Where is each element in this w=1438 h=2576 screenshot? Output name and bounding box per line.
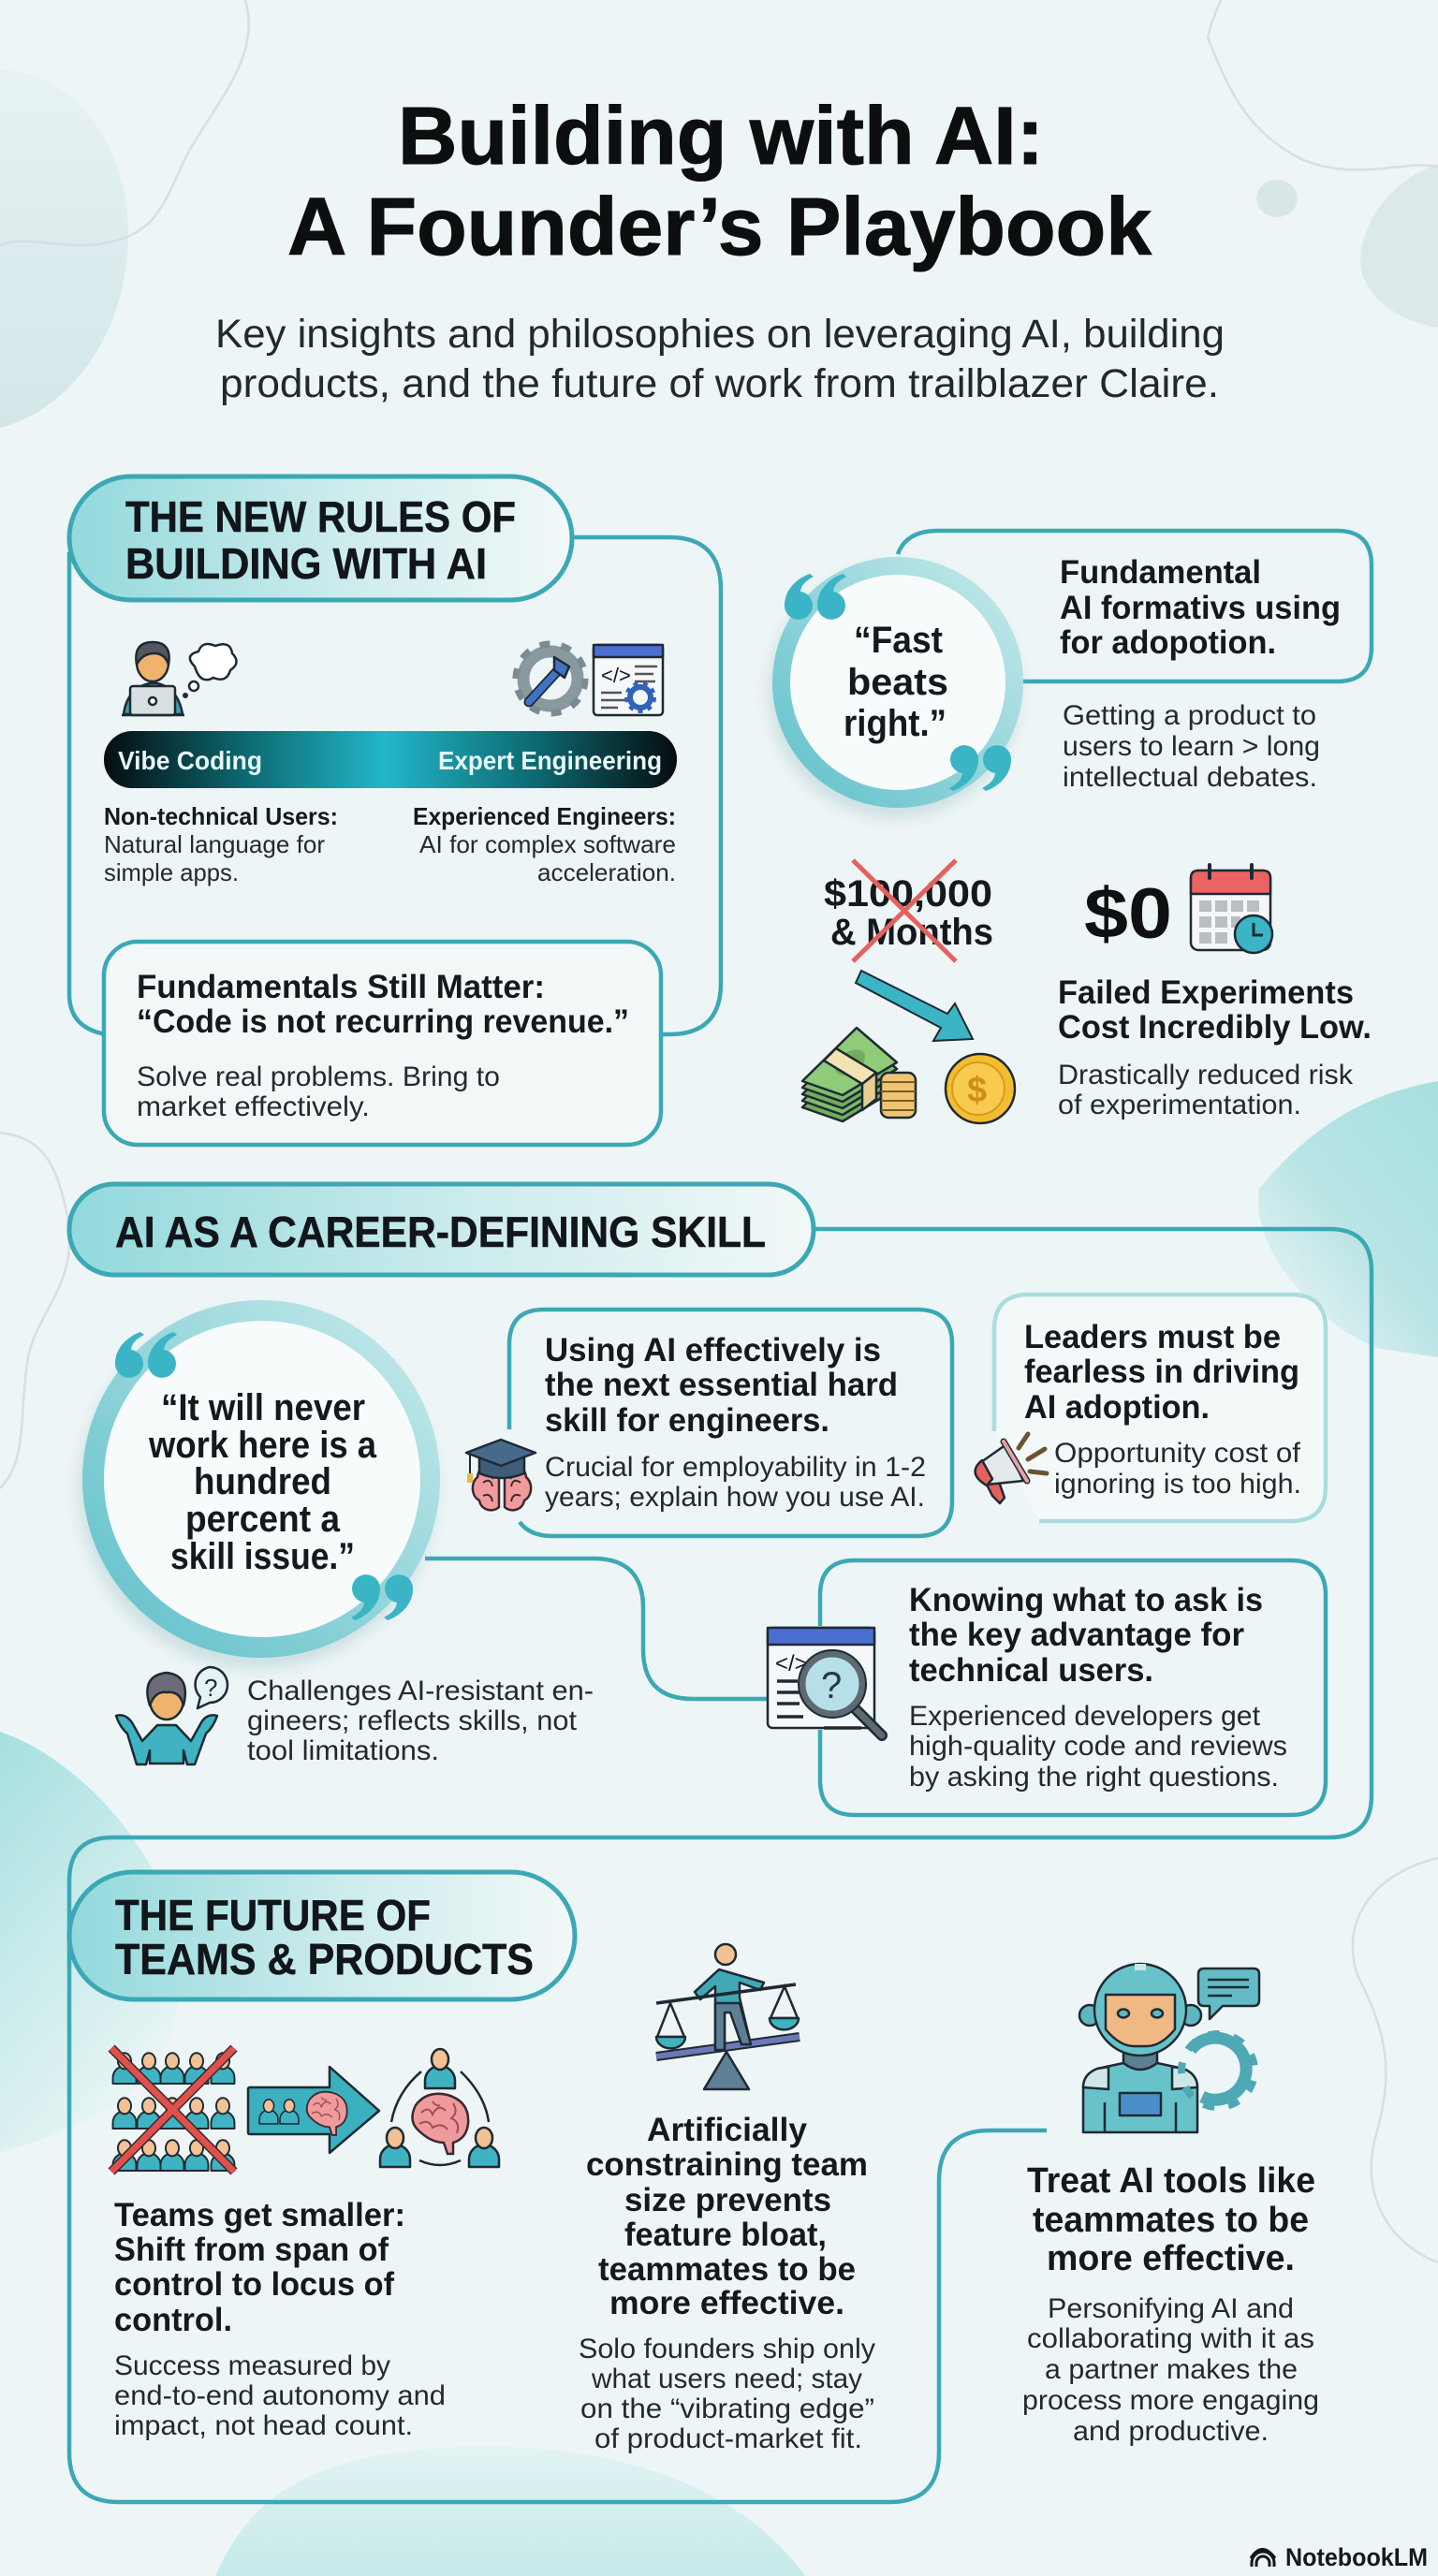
text: challenges AI-resistant engineers: gineers; reflects skills, not <box>247 1705 578 1736</box>
text: treat AI tools like teammates: and productive. <box>1073 2416 1269 2447</box>
arrow: team and brain <box>248 2067 379 2153</box>
crossed out cost: $100,000 <box>824 873 992 915</box>
icon: robot teammate <box>1079 1964 1201 2132</box>
box: using AI effectively: Using AI effectively is <box>545 1332 881 1368</box>
panel: the new rules of building with AI <box>69 476 721 1145</box>
text: failed experiments <box>1058 974 1372 1120</box>
box: knowing what to ask: by asking the right questions. <box>909 1762 1279 1793</box>
icon: graduation cap on brain <box>466 1440 536 1510</box>
subtitle: Key insights and philosophies on leveraging AI, building <box>215 312 1225 357</box>
icon: close quote <box>351 1574 413 1620</box>
text: teams get smaller: Success measured by <box>114 2350 390 2381</box>
text: teams get smaller <box>114 2197 446 2441</box>
text: teams get smaller: control. <box>114 2302 232 2338</box>
text: treat AI tools like teammates: a partner makes the <box>1045 2354 1298 2385</box>
icon: person with laptop thinking <box>122 642 237 715</box>
icon: code window with magnifier: </> <box>775 1651 808 1676</box>
panel: cost of experiments <box>802 860 1372 1123</box>
icon: person balancing on scale <box>656 1944 800 2089</box>
panel outline <box>69 537 721 1034</box>
icon: question bubble <box>196 1667 227 1708</box>
box: knowing what to ask: Knowing what to ask is <box>909 1582 1263 1618</box>
box: knowing what to ask: the key advantage for <box>909 1617 1244 1653</box>
text: treat AI tools like teammates <box>1022 2161 1319 2447</box>
icon: gold coin <box>946 1054 1015 1123</box>
panel: the future of teams and products <box>69 1872 1319 2502</box>
callout: fundamentals still matter: market effectively. <box>137 1091 370 1122</box>
text: getting a product to users: intellectual debates. <box>1063 762 1317 793</box>
icon: crossed out large team <box>111 2048 234 2172</box>
box: fundamental AI formatives <box>898 531 1372 681</box>
box: fundamental AI formatives: Fundamental <box>1060 554 1261 591</box>
text: getting a product to users: Getting a product to <box>1063 700 1316 731</box>
text: treat AI tools like teammates: Personifying AI and <box>1048 2293 1294 2324</box>
box: fundamental AI formatives: for adopotion. <box>1060 624 1276 661</box>
box: leaders must be fearless <box>994 1295 1326 1521</box>
subtitle <box>215 312 1225 406</box>
text: non-technical users <box>104 802 338 886</box>
text: non-technical users: Natural language for <box>104 830 325 858</box>
callout: fundamentals still matter: “Code is not recurring revenue.” <box>137 1003 629 1040</box>
box: fundamental AI formatives: AI formativs using <box>1060 590 1341 626</box>
text: artificially constraining team size: constraining team <box>586 2146 868 2183</box>
box: leaders must be fearless: Opportunity cost of <box>1054 1438 1301 1469</box>
text: artificially constraining team size: teammates to be <box>598 2251 856 2288</box>
text: $0: $0 <box>1084 874 1172 954</box>
quote circle <box>79 1300 440 1669</box>
subtitle: products, and the future of work from trailblazer Claire. <box>220 361 1219 406</box>
text: challenges AI-resistant engineers <box>247 1676 594 1766</box>
icon: cash stack <box>802 1028 897 1121</box>
quote circle: “Fast <box>854 620 943 661</box>
callout: fundamentals still matter <box>104 942 661 1145</box>
callout: fundamentals still matter: Fundamentals Still Matter: <box>137 969 545 1005</box>
icon: coin stack <box>881 1073 916 1118</box>
section heading pill: BUILDING WITH AI <box>125 539 487 588</box>
text: challenges AI-resistant engineers: tool limitations. <box>247 1735 439 1766</box>
icon: code window with gear: </> <box>601 664 631 687</box>
box: using AI effectively: years; explain how you use AI. <box>545 1482 925 1513</box>
box: knowing what to ask <box>820 1560 1326 1815</box>
spectrum bar: vibe coding to expert engineering: Vibe Coding <box>118 746 262 775</box>
icon: small team around brain <box>380 2049 499 2167</box>
text: experienced engineers <box>413 802 676 886</box>
icon: gear and wrench <box>516 644 585 713</box>
text: treat AI tools like teammates: more effective. <box>1047 2239 1295 2278</box>
quote circle: skill issue.” <box>170 1536 355 1577</box>
icon: code window with magnifier: ? <box>821 1665 842 1706</box>
icon: calendar with clock <box>1191 865 1272 953</box>
quote circle <box>769 557 1023 818</box>
icon: shrugging person <box>116 1673 217 1764</box>
crossed out cost <box>824 860 993 961</box>
text: teams get smaller: impact, not head count. <box>114 2410 413 2441</box>
box: using AI effectively: the next essential hard <box>545 1367 898 1403</box>
text: non-technical users: Non-technical Users: <box>104 802 338 830</box>
panel: fast beats right <box>769 531 1372 818</box>
icon: question bubble: ? <box>204 1674 217 1702</box>
arrow: downward cost <box>856 971 973 1041</box>
text: artificially constraining team size: on the “vibrating edge” <box>580 2393 874 2424</box>
text: treat AI tools like teammates: teammates to be <box>1033 2201 1309 2240</box>
text: failed experiments: Cost Incredibly Low. <box>1058 1009 1372 1046</box>
text: getting a product to users <box>1063 700 1320 793</box>
text: experienced engineers: AI for complex software <box>419 830 676 858</box>
icon: gear <box>1181 2034 1255 2107</box>
icon: open quote <box>115 1332 177 1378</box>
box: leaders must be fearless: Leaders must be <box>1024 1319 1281 1355</box>
spectrum bar: vibe coding to expert engineering <box>104 731 677 788</box>
panel: AI as a career-defining skill <box>69 1184 1372 1881</box>
icon: code window with gear <box>594 645 663 715</box>
quote circle: “It will never <box>161 1387 365 1428</box>
text: artificially constraining team size: what users need; stay <box>591 2364 862 2394</box>
text: teams get smaller: end-to-end autonomy and <box>114 2380 446 2411</box>
text: failed experiments: Failed Experiments <box>1058 974 1354 1011</box>
title: A Founder’s Playbook <box>287 182 1152 272</box>
icon: speech bubble <box>1198 1969 1259 2019</box>
panel outline <box>69 1229 1372 1881</box>
section heading pill: THE FUTURE OF <box>115 1891 431 1939</box>
spectrum bar: vibe coding to expert engineering: Expert Engineering <box>438 746 662 775</box>
panel outline <box>69 1881 1047 2502</box>
section heading pill: THE NEW RULES OF <box>125 492 516 541</box>
text: challenges AI-resistant engineers: Challenges AI-resistant en- <box>247 1676 594 1706</box>
quote circle: percent a <box>185 1499 341 1540</box>
crossed out cost: & Months <box>830 912 993 953</box>
section heading pill: AI AS A CAREER-DEFINING SKILL <box>115 1208 766 1256</box>
text: teams get smaller: Shift from span of <box>114 2232 389 2268</box>
icon: close quote <box>949 745 1011 791</box>
box: using AI effectively <box>509 1310 952 1536</box>
text: experienced engineers: Experienced Engineers: <box>413 802 676 830</box>
callout: fundamentals still matter: Solve real problems. Bring to <box>137 1061 500 1092</box>
text: treat AI tools like teammates: process more engaging <box>1022 2385 1319 2416</box>
text: getting a product to users: users to learn > long <box>1063 731 1320 762</box>
box: knowing what to ask: technical users. <box>909 1652 1153 1689</box>
quote circle: hundred <box>194 1461 331 1502</box>
title <box>287 91 1152 272</box>
connector line <box>425 1559 770 1699</box>
section heading pill: TEAMS & PRODUCTS <box>115 1935 534 1983</box>
box: knowing what to ask: high-quality code and reviews <box>909 1731 1287 1762</box>
quote circle: right.” <box>844 703 946 744</box>
text: failed experiments: Drastically reduced risk <box>1058 1060 1354 1090</box>
text: failed experiments: of experimentation. <box>1058 1090 1301 1120</box>
icon: gold coin: $ <box>967 1071 987 1110</box>
box: using AI effectively: Crucial for employability in 1-2 <box>545 1452 926 1483</box>
text: artificially constraining team size: feature bloat, <box>624 2217 827 2253</box>
text: treat AI tools like teammates: collaborating with it as <box>1027 2323 1314 2354</box>
text: artificially constraining team size: Artificially <box>647 2112 808 2148</box>
icon: megaphone <box>976 1434 1047 1503</box>
section heading pill <box>69 476 572 600</box>
text: teams get smaller: Teams get smaller: <box>114 2197 405 2233</box>
title: Building with AI: <box>398 91 1044 182</box>
quote circle: work here is a <box>148 1425 377 1466</box>
icon: open quote <box>785 574 846 620</box>
text: artificially constraining team size: of product-market fit. <box>594 2423 862 2454</box>
box: leaders must be fearless: ignoring is too high. <box>1054 1469 1301 1500</box>
box: using AI effectively: skill for engineers. <box>545 1402 829 1439</box>
text: artificially constraining team size: Solo founders ship only <box>579 2334 875 2364</box>
box: leaders must be fearless: fearless in driving <box>1024 1354 1299 1390</box>
quote circle: beats <box>847 662 948 703</box>
text: non-technical users: simple apps. <box>104 858 239 886</box>
text: artificially constraining team size: more effective. <box>609 2285 844 2321</box>
box: knowing what to ask: Experienced developers get <box>909 1701 1261 1732</box>
box: leaders must be fearless: AI adoption. <box>1024 1389 1210 1426</box>
logo: NotebookLM: NotebookLM <box>1285 2543 1428 2571</box>
icon: code window with magnifier <box>768 1628 882 1735</box>
text: treat AI tools like teammates: Treat AI tools like <box>1027 2161 1315 2201</box>
text: artificially constraining team size <box>579 2112 875 2454</box>
section heading pill <box>69 1184 814 1275</box>
section heading pill <box>69 1872 575 1999</box>
text: teams get smaller: control to locus of <box>114 2266 394 2303</box>
text: experienced engineers: acceleration. <box>537 858 676 886</box>
text: artificially constraining team size: size prevents <box>624 2182 831 2218</box>
